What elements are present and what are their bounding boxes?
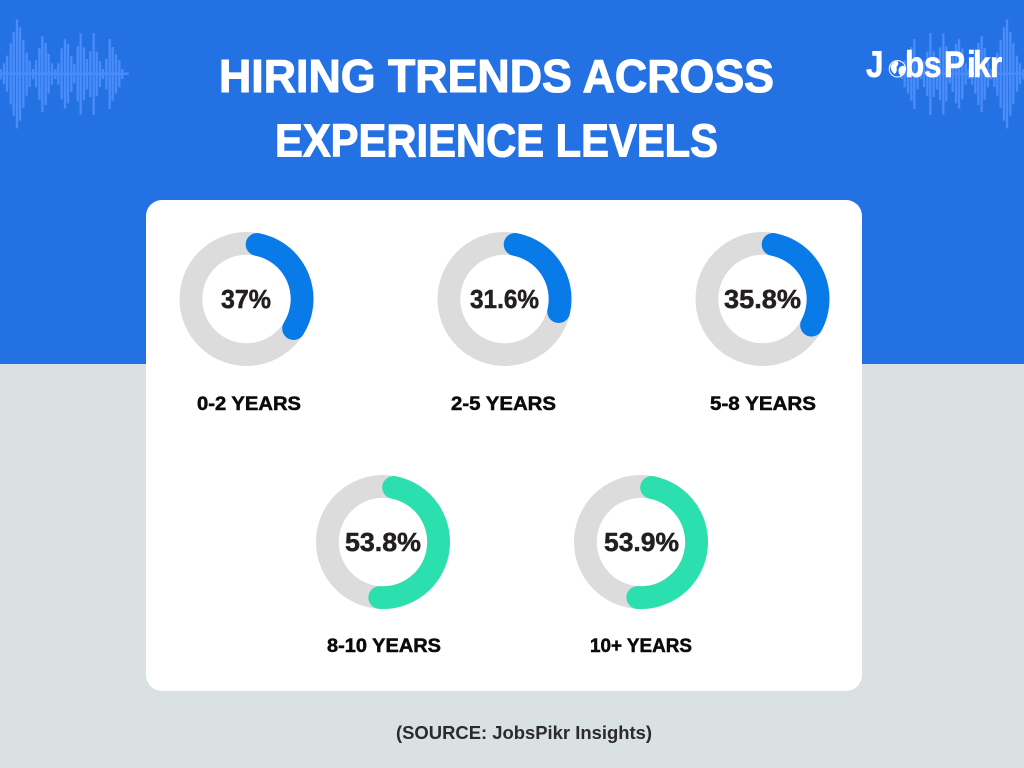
donut: 0-2 years 37%: [181, 234, 312, 364]
label: 10+ years: 10+ YEARS: [590, 636, 692, 657]
title: EXPERIENCE LEVELS: [275, 114, 718, 166]
label: 0-2 years: 0-2 YEARS: [197, 394, 301, 415]
label: 8-10 years: 8-10 YEARS: [327, 636, 441, 657]
title: [219, 50, 774, 166]
donut: 5-8 years 35.8%: 35.8%: [724, 286, 801, 314]
donut: 0-2 years 37%: 37%: [221, 286, 271, 314]
donut: 5-8 years 35.8%: [697, 234, 828, 364]
waveform: left: [0, 19, 129, 128]
header: blue band: [0, 0, 1024, 364]
donut: 10+ years 53.9%: [576, 477, 706, 607]
title: HIRING TRENDS ACROSS: [219, 50, 774, 102]
label: 5-8 years: 5-8 YEARS: [710, 394, 816, 415]
source note: (SOURCE: JobsPikr Insights): [396, 722, 652, 743]
label: 2-5 years: 2-5 YEARS: [451, 394, 556, 415]
donut: 2-5 years 31.6%: [439, 234, 570, 364]
panel: donut charts card: [146, 200, 862, 691]
donut: 2-5 years 31.6%: 31.6%: [470, 286, 539, 314]
logo: JobsPikr: JobsPikr: [866, 45, 1002, 86]
donut: 8-10 years 53.8%: [318, 477, 448, 607]
icon: globe: [889, 61, 906, 77]
donut: 8-10 years 53.8%: 53.8%: [345, 529, 421, 557]
waveform: right: [895, 19, 1024, 128]
donut: 10+ years 53.9%: 53.9%: [604, 529, 679, 557]
